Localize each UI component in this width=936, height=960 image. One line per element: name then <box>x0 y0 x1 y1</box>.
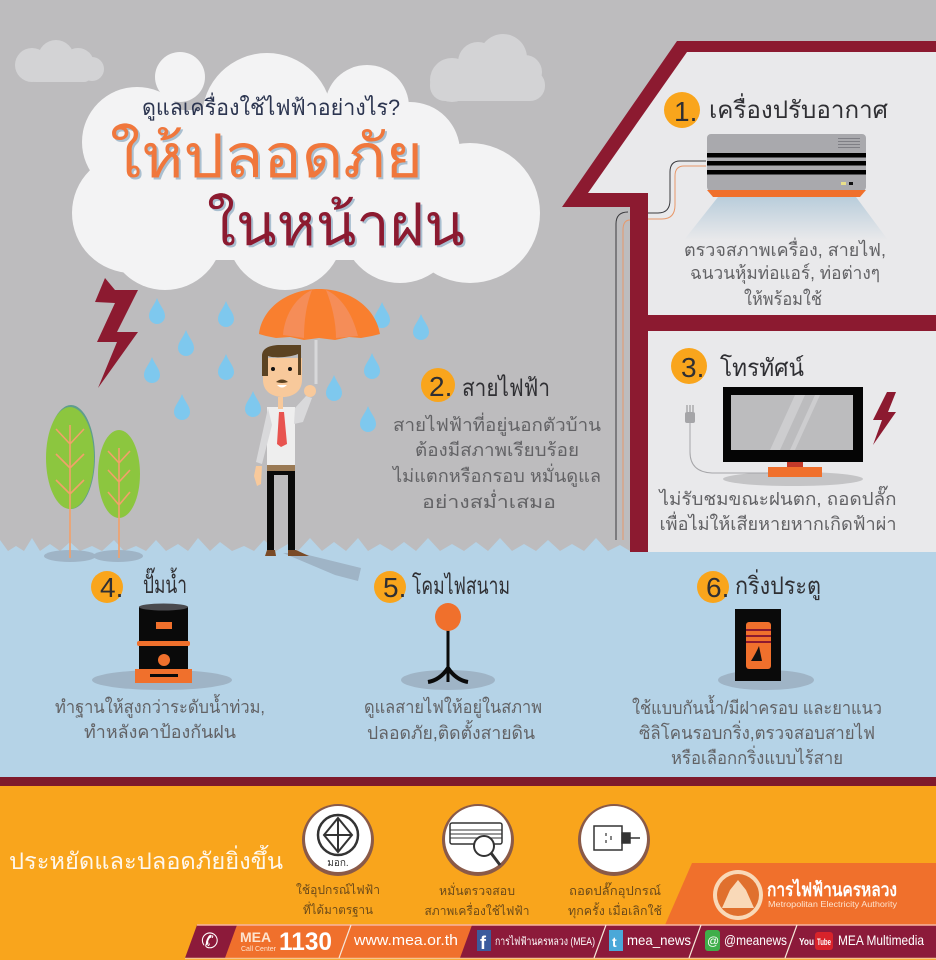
icon: door bell <box>718 609 814 690</box>
youtube: Tube <box>817 937 831 947</box>
tip: standard mark: ที่ได้มาตรฐาน <box>303 901 373 917</box>
item 6: door bell <box>632 569 882 768</box>
icon: plug and cord <box>685 405 768 473</box>
MEA logo panel <box>665 863 936 925</box>
item 1: air conditioner: 1. <box>674 96 697 127</box>
item 2: power lines: สายไฟฟ้า <box>462 374 550 402</box>
item 5: garden lamp: 5. <box>383 572 406 603</box>
twitter: mea_news <box>627 932 691 948</box>
icon: pump <box>92 604 232 690</box>
tip: inspect appliances: หมั่นตรวจสอบ <box>439 882 515 898</box>
title line one: ให้ปลอดภัย <box>110 123 423 190</box>
item 2: power lines: สายไฟฟ้าที่อยู่นอกตัวบ้าน <box>393 412 601 436</box>
icon: small lightning bolt <box>873 392 896 445</box>
call center number: 1130 <box>279 928 332 956</box>
item 1: air conditioner: ฉนวนหุ้มท่อแอร์, ท่อต่างๆ <box>690 263 880 284</box>
item 1: air conditioner <box>664 92 888 309</box>
title line two: ในหน้าฝน <box>207 192 465 258</box>
person shadow <box>283 553 361 581</box>
main title cloud <box>72 52 540 290</box>
item 2: power lines <box>391 368 601 512</box>
tip: standard mark: ใช้อุปกรณ์ไฟฟ้า <box>296 883 380 898</box>
wires along the house <box>616 161 706 540</box>
umbrella <box>259 289 380 384</box>
background cloud left <box>15 40 104 82</box>
item 5: garden lamp <box>364 571 542 743</box>
item 5: garden lamp: โคมไฟสนาม <box>412 572 510 600</box>
tip: unplug: ทุกครั้ง เมื่อเลิกใช้ <box>568 902 662 919</box>
tip: unplug: ถอดปลั๊กอุปกรณ์ <box>569 882 661 899</box>
line: @meanews <box>724 932 787 948</box>
item 2: power lines: อย่างสม่ำเสมอ <box>422 489 556 512</box>
icon: lightning bolt <box>95 278 138 388</box>
item 4: water pump: ทำฐานให้สูงกว่าระดับน้ำท่วม, <box>55 694 265 718</box>
tip: inspect appliances: สภาพเครื่องใช้ไฟฟ้า <box>424 902 530 918</box>
line: @ <box>707 934 719 948</box>
facebook: การไฟฟ้านครหลวง (MEA) <box>495 935 595 948</box>
item 6: door bell: ใช้แบบกันน้ำ/มีฝาครอบ และยาแนว <box>632 695 882 718</box>
contact strip <box>185 925 936 958</box>
item 6: door bell: กริ่งประตู <box>735 569 821 601</box>
item 4: water pump: 4. <box>100 572 123 603</box>
cloud subtitle: ดูแลเครื่องใช้ไฟฟ้าอย่างไร? <box>142 92 400 121</box>
item 1: air conditioner: เครื่องปรับอากาศ <box>709 93 888 124</box>
icon: phone: ✆ <box>201 930 219 953</box>
item 2: power lines: ไม่แตกหรือกรอบ หมั่นดูแล <box>391 463 601 487</box>
item 4: water pump: ปั๊มน้ำ <box>143 567 187 599</box>
youtube: You <box>799 937 814 948</box>
call center number <box>240 928 332 956</box>
item 3: television <box>657 348 896 534</box>
item 5: garden lamp: ปลอดภัย,ติดตั้งสายดิน <box>367 720 535 743</box>
tip: standard mark: มอก. <box>327 858 349 869</box>
line <box>705 930 787 951</box>
icon: MEA emblem <box>713 870 763 920</box>
icon: rain drops <box>144 298 429 432</box>
tip: unplug <box>568 804 662 919</box>
item 2: power lines: ต้องมีสภาพเรียบร้อย <box>415 440 579 460</box>
MEA logo panel: การไฟฟ้านครหลวง <box>767 878 897 901</box>
item 3: television: ไม่รับชมขณะฝนตก, ถอดปลั๊ก <box>657 485 896 509</box>
footer band <box>0 777 936 960</box>
item 3: television: เพื่อไม่ให้เสียหายหากเกิดฟ้าผ่า <box>660 511 896 534</box>
call center number: MEA <box>240 929 271 945</box>
facebook <box>477 930 595 953</box>
call center number: Call Center <box>241 946 277 953</box>
footer heading: ประหยัดและปลอดภัยยิ่งขึ้น <box>9 845 283 874</box>
tip: inspect appliances <box>424 804 530 918</box>
item 5: garden lamp: ดูแลสายไฟให้อยู่ในสภาพ <box>364 696 542 718</box>
person body <box>267 407 295 467</box>
icon: television <box>723 387 863 486</box>
twitter <box>609 930 691 951</box>
person with umbrella <box>254 289 380 581</box>
icon: lamp <box>401 603 495 690</box>
item 3: television: โทรทัศน์ <box>720 354 804 382</box>
item 6: door bell: 6. <box>706 572 729 603</box>
facebook: f <box>480 933 487 953</box>
youtube <box>799 932 924 950</box>
item 2: power lines: 2. <box>429 371 452 402</box>
twitter: t <box>612 934 617 950</box>
house <box>562 41 936 552</box>
item 6: door bell: ซิลิโคนรอบกริ่ง,ตรวจสอบสายไฟ <box>639 720 875 743</box>
icon: air conditioner unit <box>707 134 866 197</box>
item 4: water pump <box>55 567 265 742</box>
item 4: water pump: ทำหลังคาป้องกันฝน <box>84 722 236 742</box>
item 1: air conditioner: ให้พร้อมใช้ <box>744 288 822 309</box>
title line two: ในหน้าฝน <box>209 194 467 260</box>
tip: standard mark <box>296 804 380 917</box>
item 3: television: 3. <box>681 352 704 383</box>
air flow <box>684 197 888 240</box>
trees <box>44 405 143 562</box>
title line one: ให้ปลอดภัย <box>112 125 425 192</box>
water area <box>0 538 936 778</box>
item 1: air conditioner: ตรวจสภาพเครื่อง, สายไฟ, <box>684 237 886 260</box>
website: www.mea.or.th <box>353 932 458 949</box>
person head <box>263 358 302 397</box>
MEA logo panel: Metropolitan Electricity Authority <box>768 900 897 909</box>
item 6: door bell: หรือเลือกกริ่งแบบไร้สาย <box>671 745 843 768</box>
background cloud right <box>430 34 545 102</box>
